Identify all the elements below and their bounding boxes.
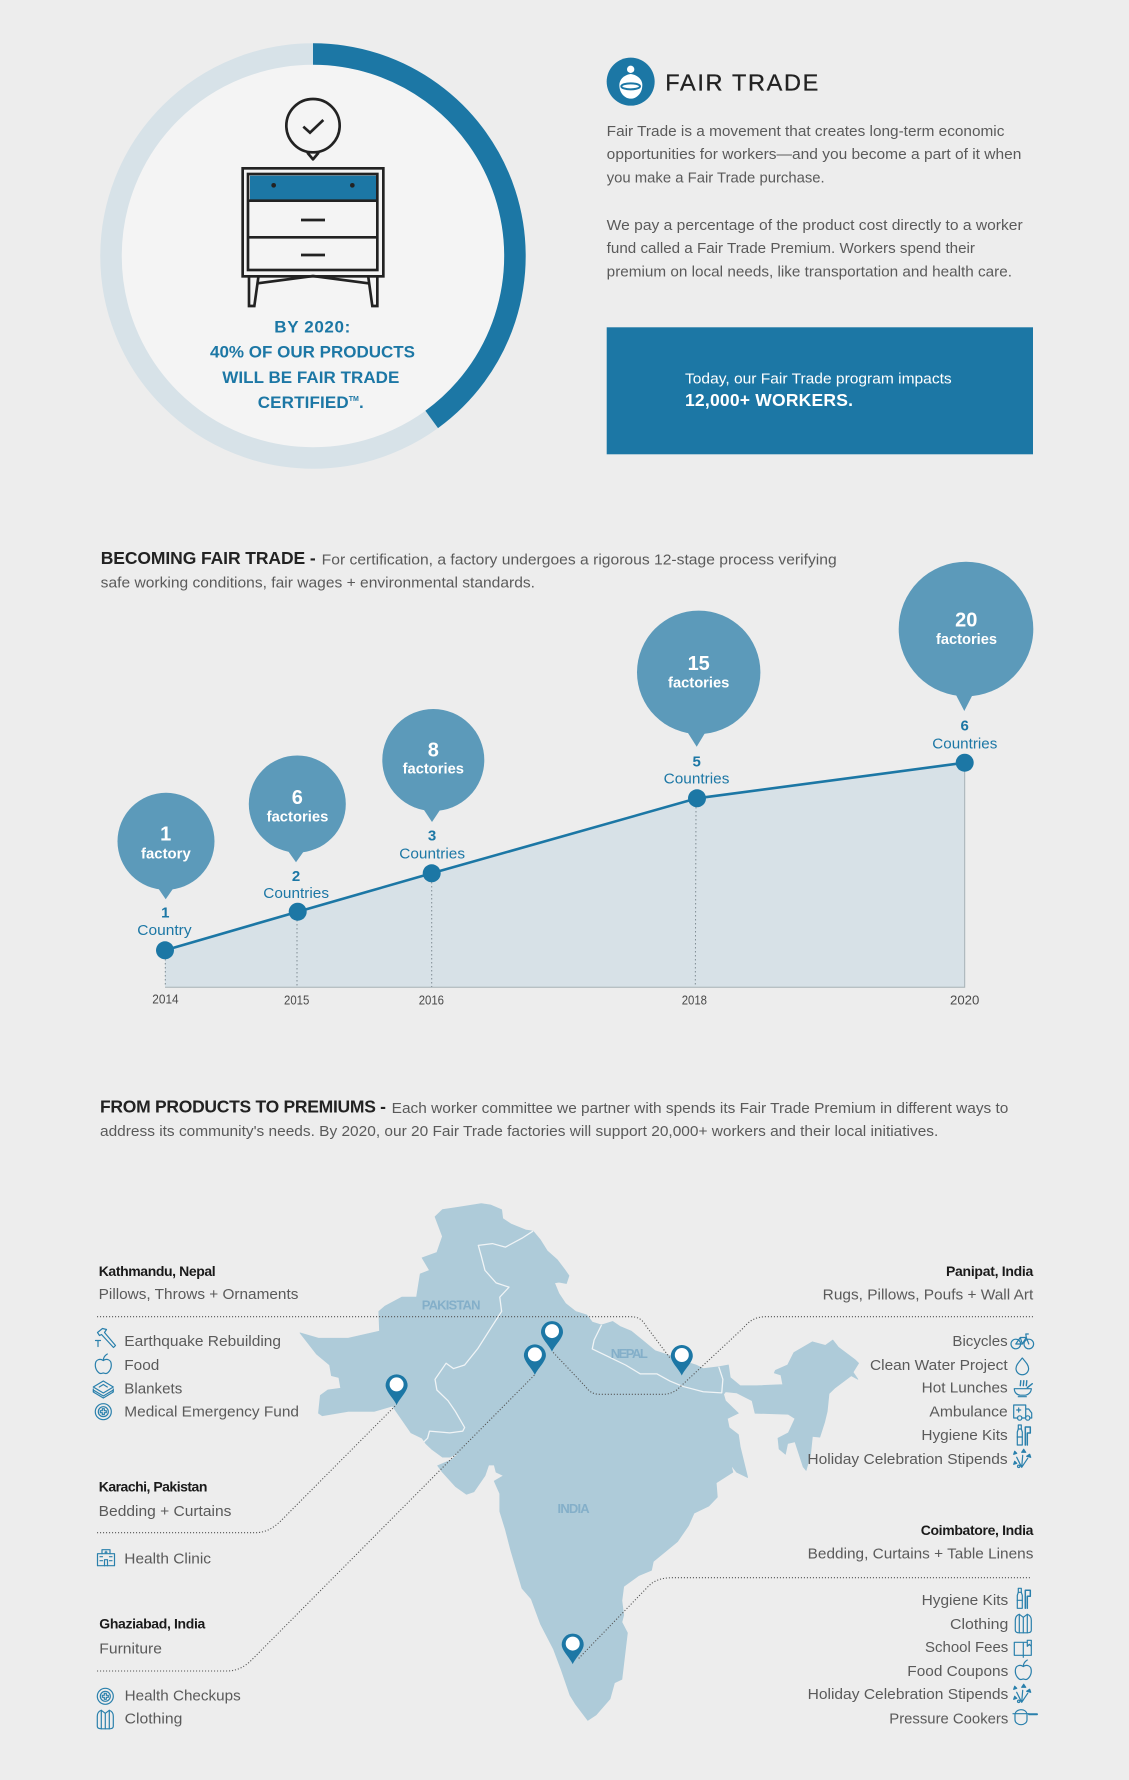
location: ghaziabad, india: [97, 1616, 241, 1729]
location: panipat, india: Rugs, Pillows, Poufs + Wall Art: [823, 1286, 1034, 1303]
location: coimbatore, india: [808, 1522, 1037, 1727]
map pin: karachi: [386, 1374, 408, 1405]
heading: from products to premiums: Each worker committee we partner with spends its Fair Trade Premium in different ways to: [392, 1100, 1008, 1117]
item: hygiene kits: Hygiene Kits: [921, 1427, 1008, 1444]
donut caption: [210, 318, 415, 412]
item: earthquake rebuilding: Earthquake Rebuilding: [124, 1333, 281, 1350]
item: holiday celebration stipends: Holiday Celebration Stipends: [807, 1451, 1008, 1468]
map pin: kathmandu: [671, 1345, 693, 1376]
x axis years: 2016: [419, 992, 444, 1007]
map pin: ghaziabad: [524, 1344, 546, 1375]
bubble: 8 factories: [382, 709, 484, 822]
donut caption: .: [359, 393, 364, 412]
label: 2 countries: [263, 868, 329, 902]
item: bicycles: Bicycles: [952, 1333, 1008, 1350]
callout: 12,000+ workers: Today, our Fair Trade program impacts: [685, 370, 952, 387]
intro paragraph: the premium: We pay a percentage of the product cost directly to a worker: [607, 217, 1023, 234]
item: blankets: [93, 1380, 182, 1398]
label: 2 countries: Countries: [263, 885, 329, 902]
map pin: coimbatore: [562, 1634, 584, 1664]
item: clothing: Clothing: [950, 1616, 1008, 1633]
bubble: 1 factory: [118, 793, 214, 899]
donut caption: CERTIFIED: [258, 393, 349, 412]
bubble: 15 factories: factories: [668, 674, 729, 691]
item: health checkups: Health Checkups: [125, 1688, 241, 1705]
chart line: [165, 763, 965, 950]
intro paragraph: the premium: [607, 217, 1023, 281]
location: panipat, india: [807, 1263, 1034, 1468]
donut caption: 40% OF OUR PRODUCTS: [210, 343, 415, 362]
item: food coupons: [907, 1660, 1031, 1680]
label: 5 countries: [664, 754, 729, 787]
location: kathmandu, nepal: Pillows, Throws + Ornaments: [99, 1286, 298, 1303]
heading: from products to premiums: address its community's needs. By 2020, our 20 Fair Trade factories will support 20,000+ workers and their local initiatives.: [100, 1123, 938, 1140]
bubble: 20 factories: [899, 562, 1033, 711]
item: food: Food: [124, 1357, 159, 1374]
item: hygiene kits: [921, 1425, 1030, 1445]
heading: from products to premiums: FROM PRODUCTS TO PREMIUMS -: [100, 1096, 386, 1116]
item: hot lunches: Hot Lunches: [922, 1380, 1008, 1397]
donut caption: WILL BE FAIR TRADE: [222, 368, 399, 387]
intro paragraph: the premium: fund called a Fair Trade Premium. Workers spend their: [607, 240, 975, 257]
x axis years: 2018: [682, 992, 707, 1007]
item: clothing: Clothing: [125, 1710, 182, 1727]
callout: 12,000+ workers: 12,000+ WORKERS.: [685, 390, 853, 410]
item: holiday celebration stipends: Holiday Celebration Stipends: [808, 1686, 1008, 1703]
item: blankets: Blankets: [124, 1380, 182, 1397]
label: 5 countries: 5: [693, 754, 701, 771]
x axis years: 2015: [284, 992, 309, 1007]
donut caption: TM: [349, 396, 359, 403]
location: ghaziabad, india: Ghaziabad, India: [99, 1616, 206, 1632]
intro paragraph: what fair trade is: opportunities for workers—and you become a part of it when: [607, 146, 1021, 163]
leader line: karachi: [97, 1404, 397, 1533]
label: 1 country: Country: [137, 922, 192, 939]
intro paragraph: what fair trade is: you make a Fair Trade purchase.: [607, 170, 825, 187]
heading: becoming fair trade: For certification, a factory undergoes a rigorous 12-stage process verifying: [322, 551, 837, 568]
map label: india: INDIA: [558, 1501, 590, 1516]
donut caption: BY 2020:: [274, 318, 350, 337]
location: kathmandu, nepal: [93, 1263, 299, 1421]
leader line: coimbatore: [578, 1578, 1030, 1660]
item: school fees: School Fees: [925, 1639, 1008, 1656]
item: food coupons: Food Coupons: [907, 1663, 1008, 1680]
leader line: ghaziabad: [97, 1374, 535, 1671]
item: earthquake rebuilding: [96, 1328, 281, 1350]
intro paragraph: what fair trade is: [607, 123, 1021, 187]
bubble: 20 factories: factories: [936, 631, 997, 648]
bubble: 6 factories: factories: [267, 808, 328, 825]
label: 3 countries: [399, 828, 465, 862]
item: clean water project: Clean Water Project: [870, 1357, 1009, 1374]
bubble: 8 factories: 8: [428, 740, 439, 762]
location: ghaziabad, india: Furniture: [99, 1640, 162, 1657]
item: ambulance: Ambulance: [929, 1404, 1008, 1421]
label: 3 countries: 3: [428, 828, 436, 845]
chart points: [156, 754, 974, 959]
location: kathmandu, nepal: Kathmandu, Nepal: [99, 1263, 216, 1279]
logo wordmark: FAIR TRADE: [665, 70, 818, 96]
location: karachi, pakistan: [98, 1479, 231, 1567]
item: hygiene kits: Hygiene Kits: [922, 1592, 1008, 1609]
label: 2 countries: 2: [292, 868, 300, 885]
bubble: 1 factory: factory: [141, 845, 191, 862]
label: 6 countries: Countries: [932, 735, 997, 752]
label: 5 countries: Countries: [664, 770, 729, 787]
map label: nepal: NEPAL: [611, 1346, 648, 1361]
item: pressure cookers: Pressure Cookers: [889, 1710, 1008, 1727]
item: clothing: [97, 1710, 182, 1729]
intro paragraph: the premium: premium on local needs, like transportation and health care.: [607, 264, 1012, 281]
icon: dresser with checkmark speech bubble: [243, 99, 383, 306]
icon: fair trade badge: [607, 58, 655, 106]
heading: becoming fair trade: safe working conditions, fair wages + environmental standards.: [101, 574, 535, 591]
label: 6 countries: 6: [961, 718, 969, 735]
label: 1 country: [137, 905, 192, 939]
bubble: 6 factories: 6: [292, 787, 303, 809]
heading: becoming fair trade: BECOMING FAIR TRADE -: [101, 548, 316, 568]
label: 6 countries: [932, 718, 997, 752]
bubble: 20 factories: 20: [955, 610, 977, 632]
leader line: kathmandu: [97, 1317, 670, 1358]
item: health clinic: Health Clinic: [124, 1550, 212, 1567]
location: coimbatore, india: Coimbatore, India: [921, 1522, 1034, 1538]
callout: 12,000+ workers: [607, 327, 1033, 454]
bubble: 1 factory: 1: [160, 824, 171, 846]
x axis years: [152, 991, 979, 1007]
donut chart: 40 percent of products: [111, 54, 515, 458]
location: karachi, pakistan: Bedding + Curtains: [99, 1503, 231, 1520]
location: coimbatore, india: Bedding, Curtains + Table Linens: [808, 1545, 1033, 1562]
item: bicycles: [952, 1333, 1034, 1350]
location: panipat, india: Panipat, India: [946, 1263, 1034, 1279]
line chart: factories and countries over time: [152, 754, 979, 1007]
heading: from products to premiums: [100, 1096, 1008, 1140]
bubble: 15 factories: [637, 611, 760, 747]
map pin: panipat: [541, 1321, 563, 1352]
item: hygiene kits: [922, 1588, 1030, 1609]
bubble: 8 factories: factories: [403, 760, 464, 777]
x axis years: 2020: [950, 992, 979, 1007]
item: food: [95, 1354, 159, 1374]
leader line: panipat: [552, 1317, 1033, 1394]
x axis years: 2014: [152, 991, 179, 1006]
heading: becoming fair trade: [101, 548, 837, 591]
chart area: [165, 763, 965, 987]
intro paragraph: what fair trade is: Fair Trade is a movement that creates long-term economic: [607, 123, 1005, 140]
map: south asia: [300, 1204, 859, 1720]
map label: pakistan: PAKISTAN: [422, 1297, 480, 1312]
item: clothing: [950, 1614, 1031, 1633]
location: karachi, pakistan: Karachi, Pakistan: [99, 1479, 207, 1495]
bubble: 6 factories: [249, 756, 346, 862]
label: 1 country: 1: [161, 905, 169, 922]
label: 3 countries: Countries: [399, 845, 465, 862]
bubble: 15 factories: 15: [688, 653, 710, 675]
logo: fair trade: [607, 58, 818, 106]
item: medical emergency fund: Medical Emergency Fund: [124, 1404, 299, 1421]
